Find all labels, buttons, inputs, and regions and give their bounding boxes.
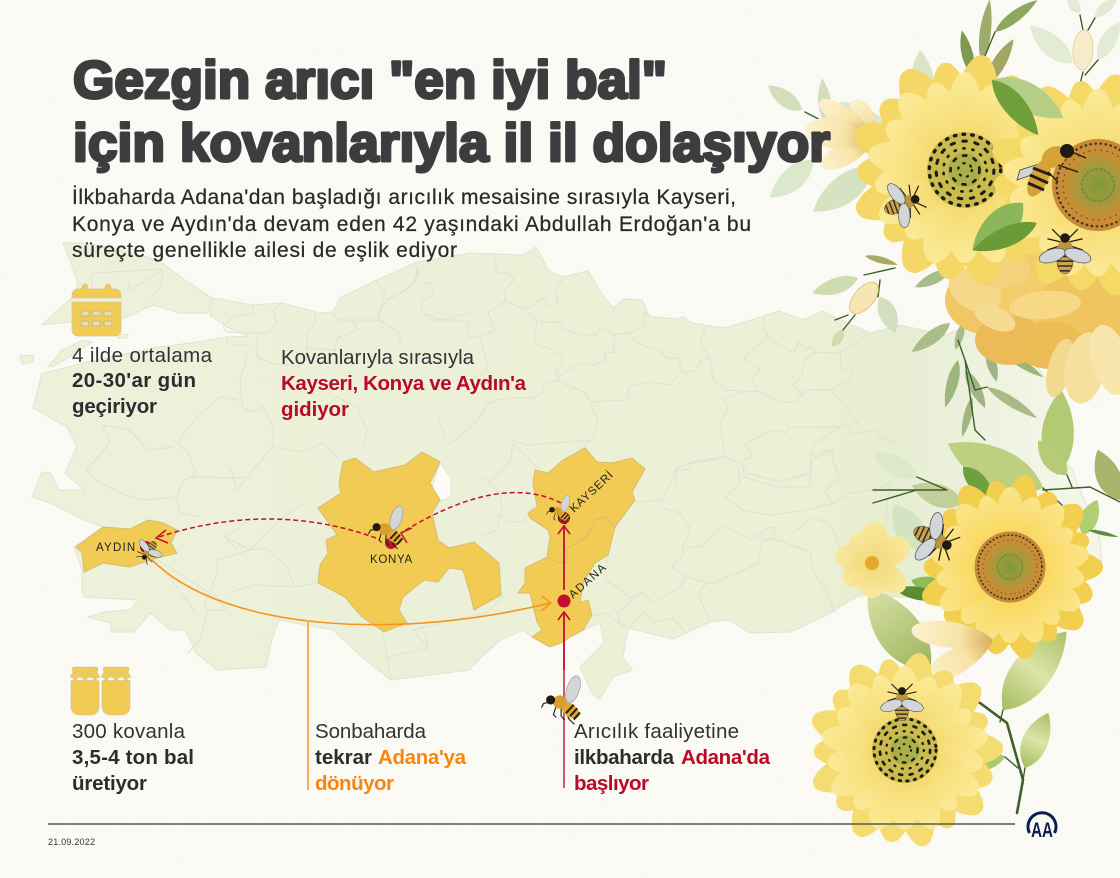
text: route order: [281, 346, 527, 421]
subtitle: İlkbaharda Adana'dan başladığı arıcılık mesaisine sırasıyla Kayseri,: [72, 186, 736, 209]
sunflower: middle: [901, 459, 1119, 675]
map: Gallipoli peninsula: [48, 340, 92, 367]
map: islands: [20, 334, 128, 364]
text: days per province: 20-30'ar gün: [72, 369, 196, 392]
title: için kovanlarıyla il il dolaşıyor: [73, 114, 830, 173]
text: spring start: ilkbaharda: [574, 746, 675, 769]
route: Konya to Aydın dashed arrow: [156, 519, 376, 543]
peony: [941, 250, 1120, 407]
bee: upper left flower: [876, 173, 931, 234]
text: production: [72, 720, 194, 795]
text: autumn return: tekrar: [315, 746, 372, 769]
leaves: [763, 0, 1120, 775]
text: production: 3,5-4 ton bal: [72, 746, 194, 769]
bee: lower right of upper flower: [1037, 229, 1093, 274]
sunflower: upper right: [966, 55, 1120, 316]
text: days per province: geçiriyor: [72, 395, 157, 418]
route: Kayseri to Konya dashed arrow: [401, 493, 561, 543]
text: production: 300 kovanla: [72, 720, 186, 743]
province: Aydın: [76, 520, 177, 572]
stems: [805, 15, 1120, 813]
bee: upper right flower: [1017, 142, 1086, 200]
subtitle: süreçte genellikle ailesi de eşlik ediyor: [72, 239, 457, 262]
map: province borders: [87, 255, 897, 680]
footer rule: [48, 823, 1015, 825]
bee: bottom flower: [879, 684, 925, 721]
text: spring start: Arıcılık faaliyetine: [574, 720, 739, 743]
text: autumn return: Adana'ya: [378, 746, 467, 769]
text: days per province: 4 ilde ortalama: [72, 344, 213, 367]
bee: Kayseri: [546, 494, 572, 524]
text: days per province: [72, 344, 213, 418]
logo: AA: [1028, 813, 1056, 842]
text: autumn return: dönüyor: [315, 772, 394, 795]
bud: upper right: [1072, 29, 1094, 71]
label: KONYA: KONYA: [370, 554, 413, 566]
marker: Adana: [558, 594, 570, 608]
province: Konya: [318, 452, 501, 632]
callout line: orange: [307, 620, 309, 790]
subtitle: Konya ve Aydın'da devam eden 42 yaşındaki Abdullah Erdoğan'a bu: [72, 213, 751, 236]
sunflower: bottom: [791, 638, 1019, 863]
icon: honey jars: [70, 667, 131, 715]
icon: calendar: [72, 284, 121, 336]
label: KAYSERİ: KAYSERİ: [567, 468, 616, 515]
sunflower: upper left: [830, 37, 1100, 304]
lake Tuz: [432, 463, 451, 501]
date: 21.09.2022: [48, 837, 95, 847]
route: Aydın back to Adana orange arrow: [152, 560, 551, 625]
leaf: green upper front: [984, 66, 1071, 142]
text: spring start: Adana'da: [681, 746, 771, 769]
province: Adana: [518, 517, 615, 647]
bee: start of route: [542, 674, 583, 724]
logo: AA: AA: [1031, 817, 1053, 842]
text: route order: gidiyor: [281, 398, 349, 421]
marker: Kayseri: [558, 512, 570, 524]
marker: Aydın: [140, 541, 152, 553]
text: route order: Kayseri, Konya ve Aydın'a: [281, 372, 527, 395]
text: production: üretiyor: [72, 772, 147, 795]
magnolia: lower: [910, 617, 999, 690]
map of Turkey: [20, 243, 1102, 699]
map: Thrace: [42, 243, 212, 325]
title: Gezgin arıcı "en iyi bal": [73, 51, 667, 110]
bee: Konya: [368, 504, 406, 549]
text: autumn return: [315, 720, 467, 795]
label: ADANA: ADANA: [567, 562, 609, 601]
bee: middle flower: [903, 505, 967, 574]
text: spring start: başlıyor: [574, 772, 649, 795]
floral decoration: [763, 0, 1120, 863]
cosmos flower: [832, 520, 915, 599]
bee: Aydın: [130, 533, 167, 569]
map: Anatolia: [32, 247, 1102, 699]
marker: Konya: [385, 537, 397, 549]
text: route order: Kovanlarıyla sırasıyla: [281, 346, 475, 369]
label: AYDIN: AYDIN: [96, 542, 136, 554]
bud: lower left: [844, 277, 884, 319]
province: Kayseri: [528, 448, 645, 563]
subtitle: [72, 186, 751, 262]
text: autumn return: Sonbaharda: [315, 720, 427, 743]
text: spring start: [574, 720, 771, 795]
leaf: green front: [963, 193, 1041, 262]
magnolia: upper left: [804, 93, 883, 176]
title: [73, 51, 830, 173]
route: red vertical with arrows: [558, 525, 570, 788]
